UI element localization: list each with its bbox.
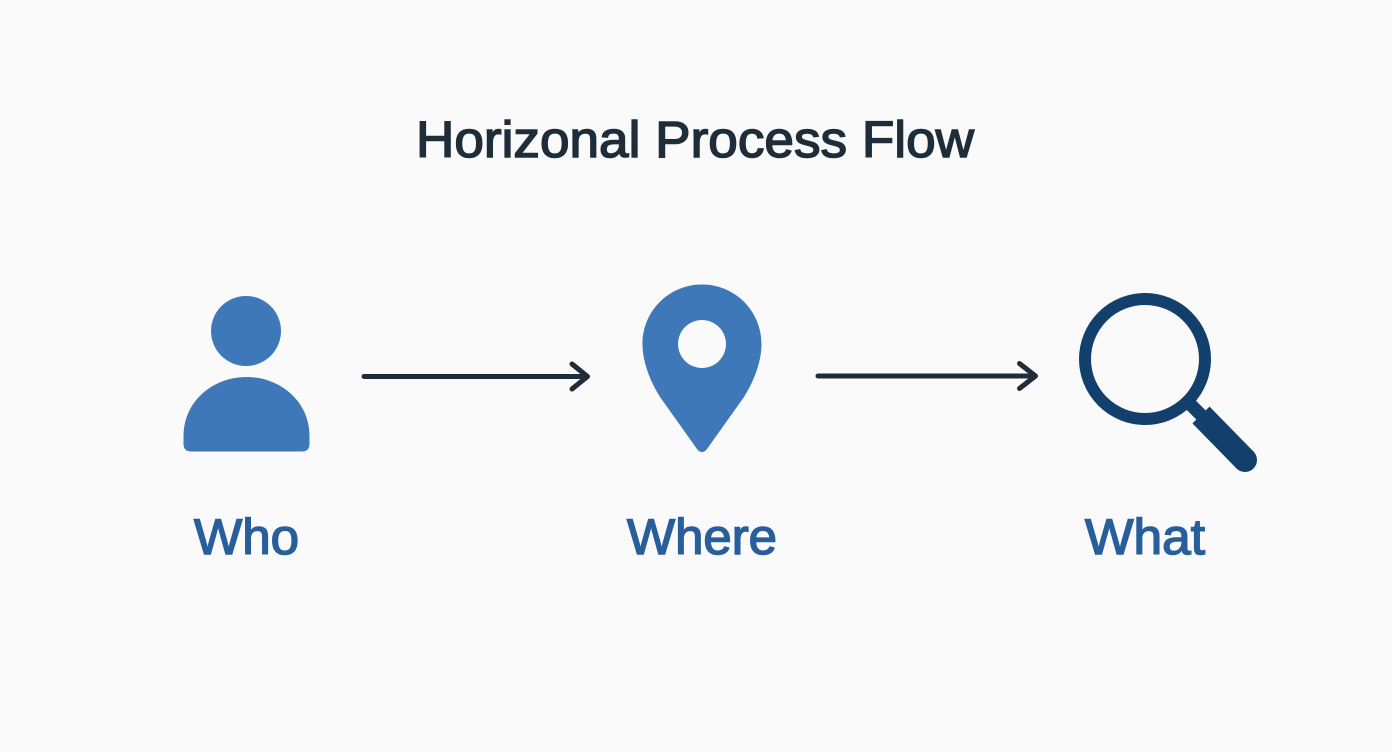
label: where: Where <box>627 509 777 565</box>
title: Horizonal Process Flow <box>416 111 974 168</box>
label: who: Who <box>194 509 299 565</box>
arrow: where to what <box>818 364 1036 388</box>
label: what: What <box>1085 509 1205 565</box>
icon: location pin <box>642 284 762 452</box>
icon: magnifying glass <box>1085 299 1257 472</box>
arrow: who to where <box>364 364 588 389</box>
icon: person <box>184 296 310 452</box>
